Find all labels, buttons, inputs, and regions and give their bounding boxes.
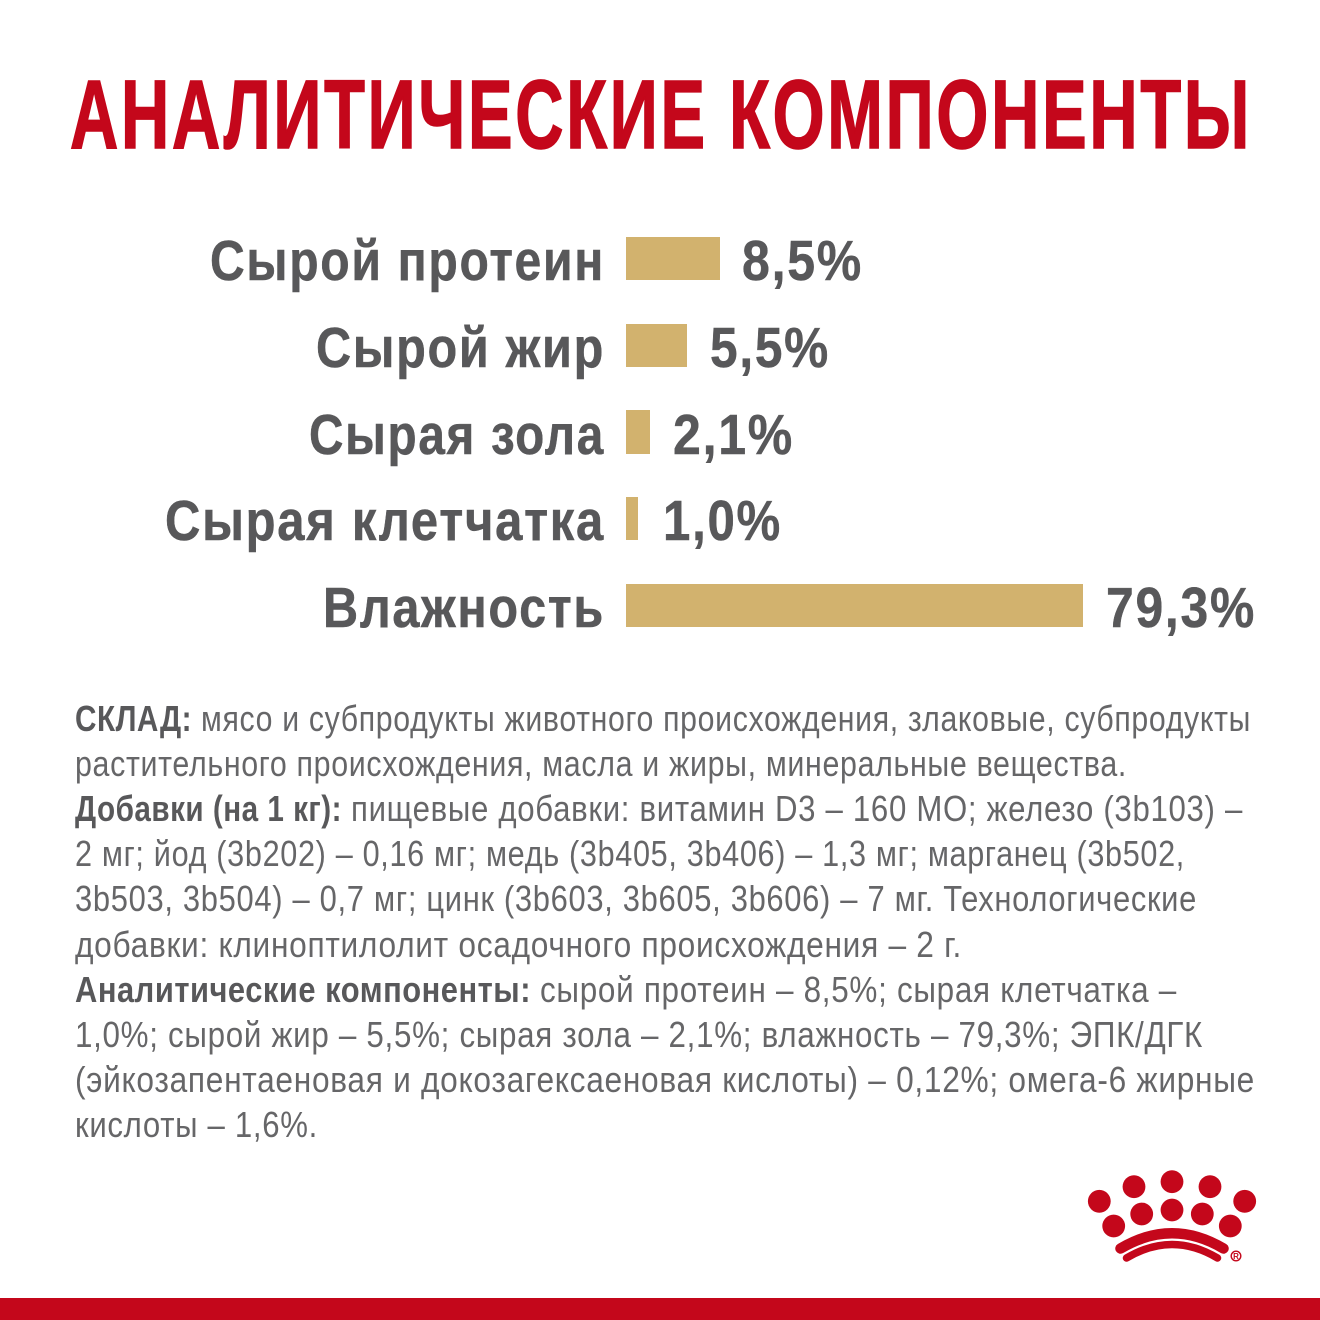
icon: crown logo: R [1233,1252,1239,1261]
analytical components line [75,969,1177,1010]
row: crude fat: Сырой жир [316,316,605,380]
analytical components line: Аналитические компоненты: [75,969,531,1010]
text block: composition: растительного происхождения, масла и жиры, минеральные вещества. [75,743,1127,784]
row: moisture: 79,3% [1106,576,1256,640]
row: crude fat [316,316,830,380]
row: crude ash: 2,1% [673,403,794,467]
row: moisture: Влажность [323,576,605,640]
additives line: Добавки (на 1 кг): [75,788,342,829]
row: crude protein: Сырой протеин [210,229,605,293]
text block: composition: добавки: клиноптилолит осадочного происхождения – 2 г. [75,924,962,965]
analytical components line: сырой протеин – 8,5%; сырая клетчатка – [540,969,1177,1010]
bar chart: analytical components [165,229,1256,640]
row: moisture [323,576,1256,640]
footer bar [0,1298,1320,1320]
row: crude protein: 8,5% [742,229,863,293]
text block: composition [75,698,1255,1145]
row: crude ash: Сырая зола [309,403,605,467]
text block: composition: кислоты – 1,6%. [75,1104,318,1145]
icon: crown logo [1088,1170,1256,1261]
row: crude fibre: Сырая клетчатка [165,489,605,553]
row: crude fat: 5,5% [710,316,830,380]
row: crude fibre: 1,0% [663,489,782,553]
composition heading line: СКЛАД: [75,698,192,739]
